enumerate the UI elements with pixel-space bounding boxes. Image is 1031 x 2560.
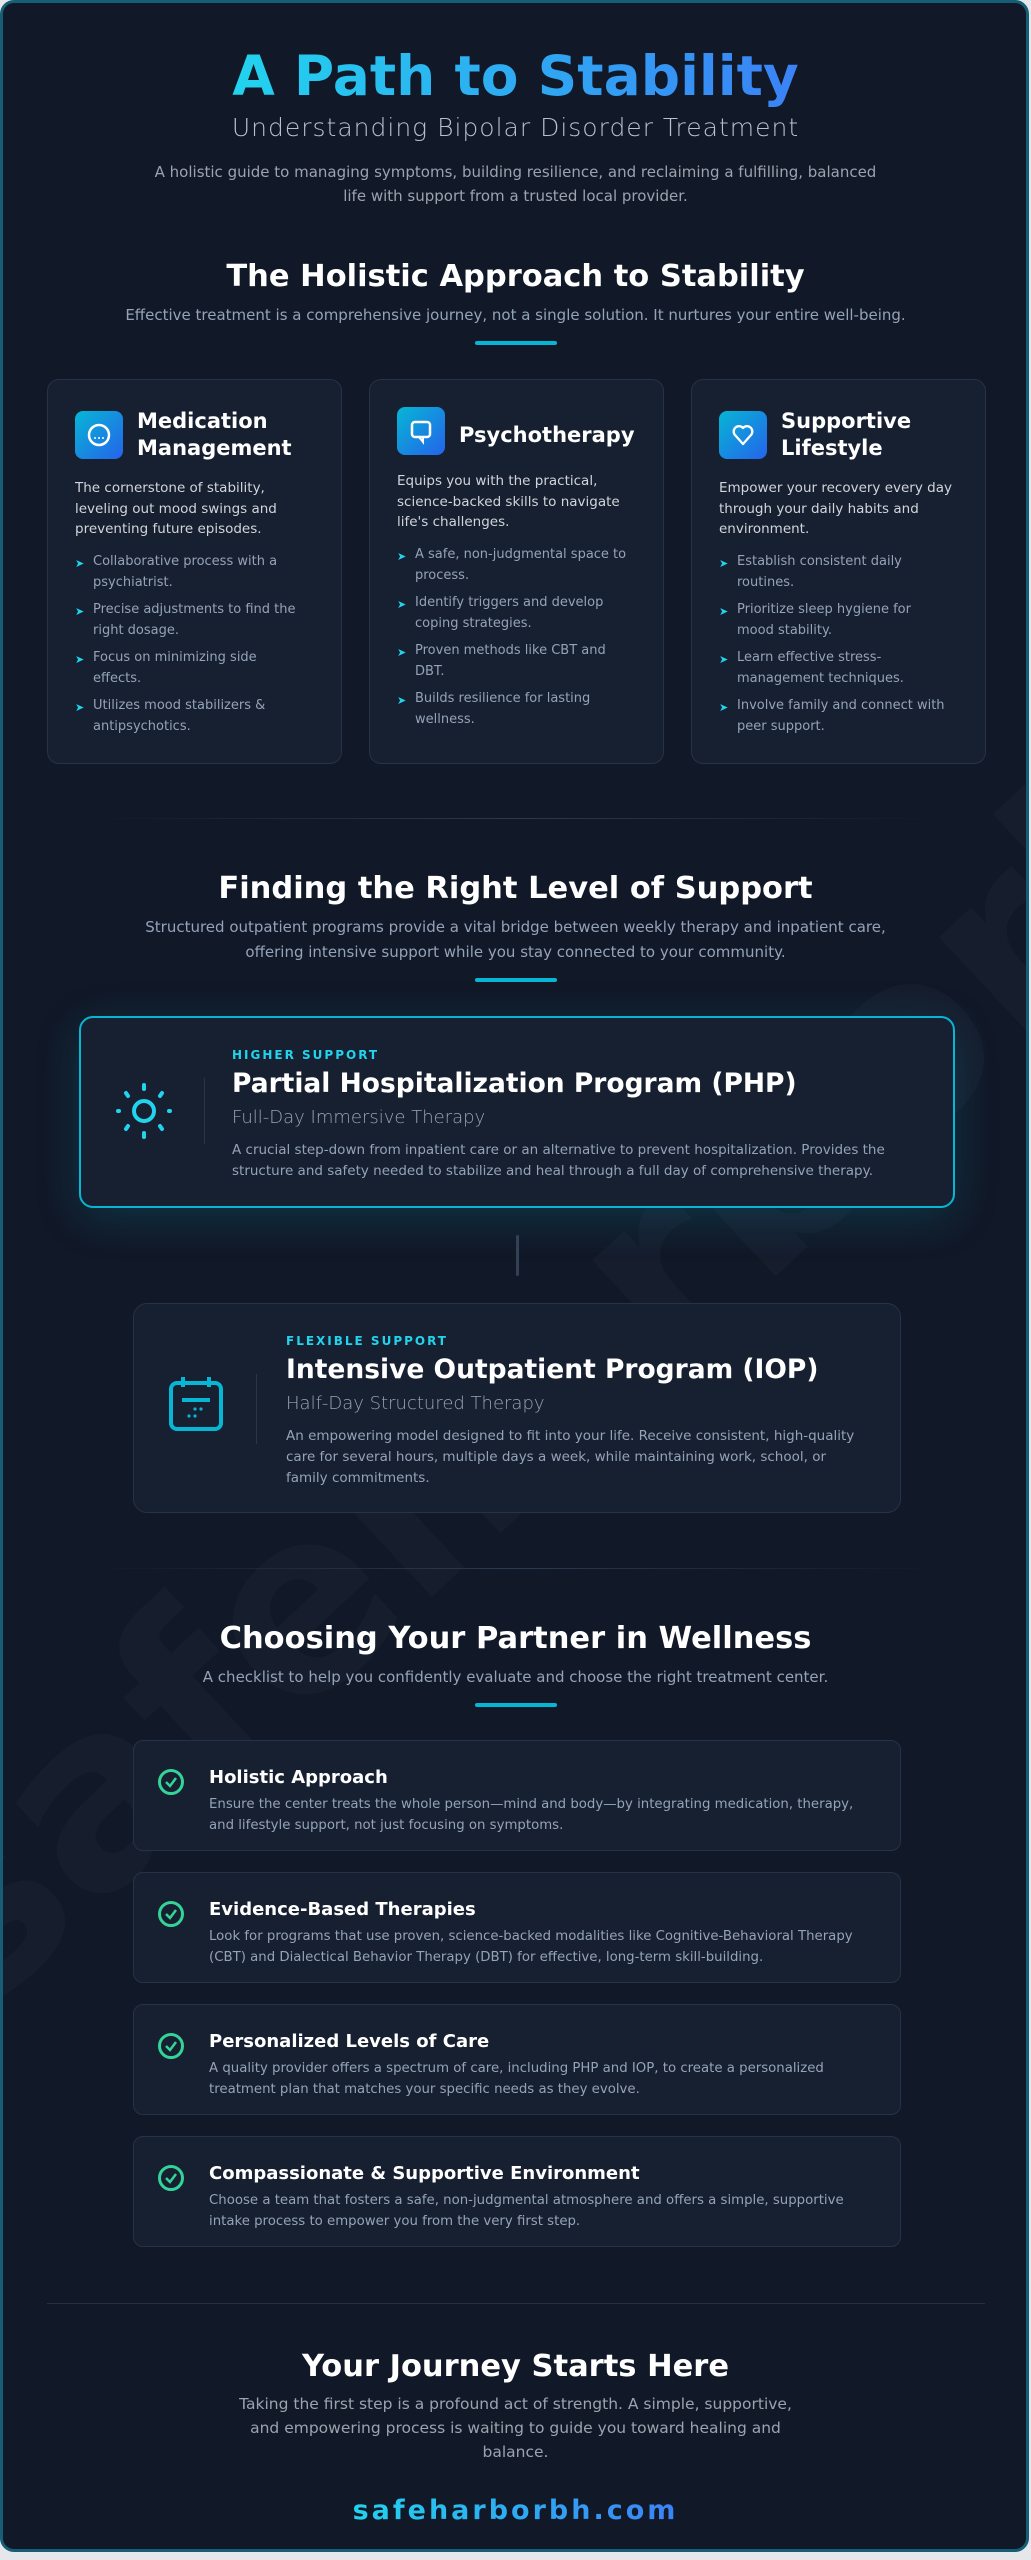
icon: heart: [719, 411, 767, 459]
subheading: holistic: Effective treatment is a comprehensive journey, not a single solution. It nurtures your entire well-being.: [125, 306, 906, 324]
icon: pill: [75, 411, 123, 459]
checklist item: compassionate: Compassionate & Supportive Environment: [209, 2163, 640, 2184]
bullet list: Learn effective stress-management techniques.: [737, 650, 904, 686]
checklist item: compassionate: [133, 2136, 901, 2247]
PHP text: Partial Hospitalization Program (PHP): [232, 1068, 797, 1099]
bullet list: Proven methods like CBT and DBT.: [415, 643, 606, 678]
bullet list: [398, 547, 626, 726]
icon: sun: [116, 1083, 172, 1139]
bullet list: Collaborative process with a psychiatrist.: [93, 554, 277, 590]
connector: [516, 1235, 519, 1276]
bullet list: Builds resilience for lasting wellness.: [415, 691, 590, 726]
icon: chat: [397, 407, 445, 455]
bullet list: Prioritize sleep hygiene for mood stability.: [737, 602, 911, 638]
panel: medication management: [47, 379, 342, 764]
card title: [137, 409, 292, 460]
checklist item: holistic: [133, 1740, 901, 1851]
PHP text: Full-Day Immersive Therapy: [232, 1107, 485, 1128]
card title: Supportive: [781, 409, 911, 433]
heading: holistic approach: The Holistic Approach to Stability: [226, 259, 805, 294]
title: A Path to Stability: [232, 44, 799, 108]
card title: Management: [137, 436, 292, 460]
checklist item: holistic: Holistic Approach: [209, 1767, 388, 1788]
IOP text: An empowering model designed to fit into your life. Receive consistent, high-quality care for several hours, multiple days a week, while maintaining work, school, or family commitments.: [286, 1428, 854, 1486]
bullet list: Utilizes mood stabilizers & antipsychotics.: [93, 698, 265, 734]
checklist item: personalized: [133, 2004, 901, 2115]
intro text: A holistic guide to managing symptoms, building resilience, and reclaiming a fulfilling, balanced life with support from a trusted local provider.: [155, 163, 876, 205]
bullet list: Establish consistent daily routines.: [737, 554, 902, 590]
website url: safeharborbh.com: [353, 2495, 678, 2526]
checklist item: evidence: Evidence-Based Therapies: [209, 1899, 476, 1920]
icon: calendar: [169, 1377, 223, 1431]
bullet list: Identify triggers and develop coping strategies.: [415, 595, 603, 630]
card title: [781, 409, 911, 460]
PHP text: [232, 1048, 885, 1179]
card title: Lifestyle: [781, 436, 883, 460]
bullet list: Precise adjustments to find the right dosage.: [93, 602, 296, 638]
card title: Medication: [137, 409, 268, 433]
checklist item: evidence: [133, 1872, 901, 1983]
card title: Psychotherapy: [459, 423, 635, 447]
IOP text: FLEXIBLE SUPPORT: [286, 1334, 448, 1348]
PHP text: A crucial step-down from inpatient care or an alternative to prevent hospitalization. Provides the structure and safety needed to stabilize and heal through a full day of comprehensive therapy.: [232, 1142, 885, 1179]
subtitle: Understanding Bipolar Disorder Treatment: [232, 113, 799, 142]
bullet list: A safe, non-judgmental space to process.: [415, 547, 626, 582]
IOP text: Half-Day Structured Therapy: [286, 1393, 545, 1414]
PHP text: HIGHER SUPPORT: [232, 1048, 379, 1062]
checklist item: personalized: Personalized Levels of Care: [209, 2031, 489, 2052]
panel: PHP: [79, 1016, 955, 1208]
checklist item: personalized: A quality provider offers a spectrum of care, including PHP and IOP, to create a personalized treatment plan that matches your specific needs as they evolve.: [209, 2061, 824, 2096]
heading: level of support: Finding the Right Level of Support: [218, 871, 813, 906]
checklist item: holistic: Ensure the center treats the whole person—mind and body—by integrating medication, therapy, and lifestyle support, not just focusing on symptoms.: [209, 1797, 853, 1832]
card description: The cornerstone of stability, leveling out mood swings and preventing future episodes.: [75, 480, 277, 537]
IOP text: [286, 1334, 854, 1486]
panel: supportive lifestyle: [691, 379, 986, 764]
IOP text: Intensive Outpatient Program (IOP): [286, 1354, 818, 1385]
closing text: Taking the first step is a profound act of strength. A simple, supportive, and empowering process is waiting to guide you toward healing and balance.: [239, 2395, 792, 2461]
bullet list: Involve family and connect with peer support.: [737, 698, 945, 734]
heading: journey: Your Journey Starts Here: [302, 2349, 729, 2384]
bullet list: [76, 554, 296, 734]
checklist item: evidence: Look for programs that use proven, science-backed modalities like Cognitive-Behavioral Therapy (CBT) and Dialectical Behavior Therapy (DBT) for effective, long-term skill-building.: [209, 1929, 853, 1964]
heading: choosing partner: Choosing Your Partner in Wellness: [220, 1621, 811, 1656]
panel: IOP: [133, 1303, 901, 1513]
bullet list: [720, 554, 945, 734]
card description: Empower your recovery every day through your daily habits and environment.: [719, 480, 952, 537]
bullet list: Focus on minimizing side effects.: [93, 650, 257, 686]
panel: psychotherapy: [369, 379, 664, 764]
subheading: level: Structured outpatient programs provide a vital bridge between weekly therapy and inpatient care, offering intensive support while you stay connected to your community.: [145, 918, 886, 961]
card description: Equips you with the practical, science-backed skills to navigate life's challenges.: [397, 473, 620, 530]
subheading: checklist: A checklist to help you confidently evaluate and choose the right treatment center.: [203, 1668, 828, 1686]
checklist item: compassionate: Choose a team that fosters a safe, non-judgmental atmosphere and offers a simple, supportive intake process to empower you from the very first step.: [209, 2193, 844, 2228]
